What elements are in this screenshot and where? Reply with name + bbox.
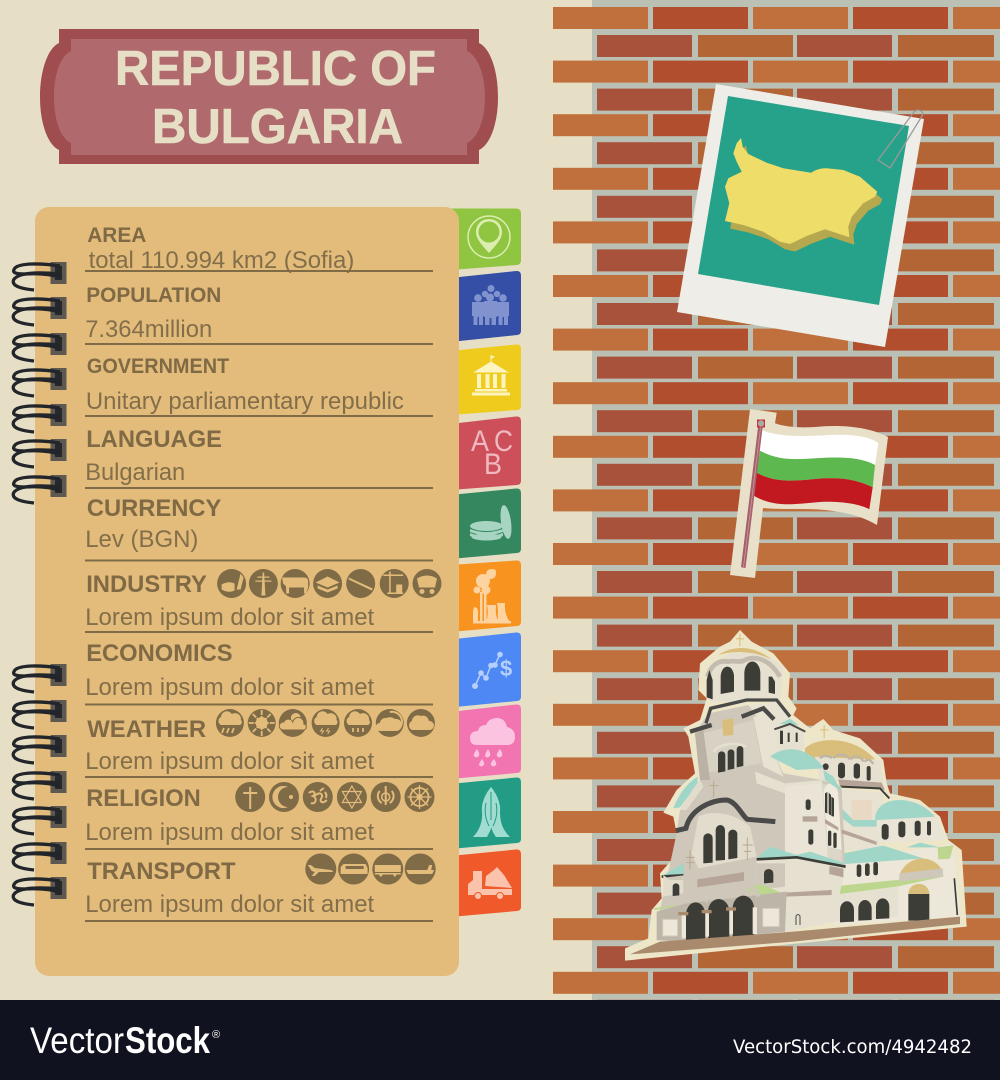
VectorStock logo: Vector [30,1020,124,1061]
row: religion: RELIGION [86,785,201,812]
title [115,41,436,154]
spiral binding: lower [13,664,66,905]
main tower and nave [657,700,877,942]
row: economics: Lorem ipsum dolor sit amet [85,674,375,701]
row: currency [85,495,433,562]
tab: currency [450,488,521,559]
paper clip [878,110,923,168]
cornices [676,700,790,831]
row: government [85,355,433,417]
tab: weather [450,704,521,779]
row: economics: ECONOMICS [86,640,233,667]
tab: language: A [471,425,489,458]
row: religion: Lorem ipsum dolor sit amet [85,819,375,846]
row: area [85,224,433,274]
row: government: GOVERNMENT [87,355,229,378]
row: weather: WEATHER [87,716,206,743]
row: weather [85,709,435,778]
title: REPUBLIC OF [115,41,436,96]
VectorStock logo [30,1020,220,1061]
row: transport [85,854,436,922]
spiral binding: upper [13,262,66,503]
row: language: LANGUAGE [86,426,222,453]
polaroid with map of Bulgaria [677,84,924,347]
rear cross [820,725,828,738]
dollar sign: $ [500,656,512,681]
tab: population [450,271,521,342]
weather icons [216,709,435,737]
religion icons [235,782,434,812]
row: transport: TRANSPORT [87,858,236,885]
rear dome [805,740,889,850]
row: population [85,284,433,345]
row: population: 7.364million [85,316,212,343]
crosses [686,781,753,870]
row: area: total 110.994 km2 (Sofia) [89,247,354,274]
VectorStock logo: Stock [125,1020,210,1061]
front block [653,847,846,935]
steps [630,917,960,954]
coloured index tabs [450,208,521,917]
tab: language: C [494,425,513,458]
tab: industry [450,560,521,632]
title: BULGARIA [152,99,403,154]
tab: language: B [484,448,502,481]
notebook panel [35,207,459,976]
transport icons [305,854,436,884]
map shadow [730,146,882,252]
row: transport: Lorem ipsum dolor sit amet [85,891,375,918]
map of Bulgaria [725,138,877,244]
right dome [875,800,946,843]
row: industry: INDUSTRY [86,571,207,598]
row: economics [85,640,433,706]
industry icons [217,569,442,598]
row: religion [85,782,434,850]
row: language: Bulgarian [85,459,185,486]
tab: economics [450,632,521,708]
sticker outline [625,630,967,961]
tab: religion [450,777,521,849]
row: industry: Lorem ipsum dolor sit amet [85,604,375,631]
top drum and gold dome [707,634,783,702]
row: currency: CURRENCY [87,495,221,522]
tab: area [450,208,521,270]
flag pole [741,423,763,568]
tab: language [450,416,521,490]
row: area: AREA [87,224,146,247]
tab: government [450,344,521,415]
row: industry [85,569,442,633]
row: government: Unitary parliamentary republic [86,388,404,415]
row: population: POPULATION [86,284,221,307]
brick wall [553,0,1000,1022]
row: weather: Lorem ipsum dolor sit amet [85,748,375,775]
footer bar [0,1000,1000,1080]
VectorStock logo: ® [212,1029,220,1041]
small cupola [770,719,842,792]
right wing [832,843,960,925]
tab: transport [450,849,521,917]
arcade [657,886,800,942]
title banner [40,29,498,164]
Alexander Nevsky cathedral sticker [625,630,967,961]
image id: VectorStock.com/4942482 [733,1036,972,1058]
row: currency: Lev (BGN) [85,526,198,553]
flag of Bulgaria [730,409,888,578]
row: language [85,426,433,489]
